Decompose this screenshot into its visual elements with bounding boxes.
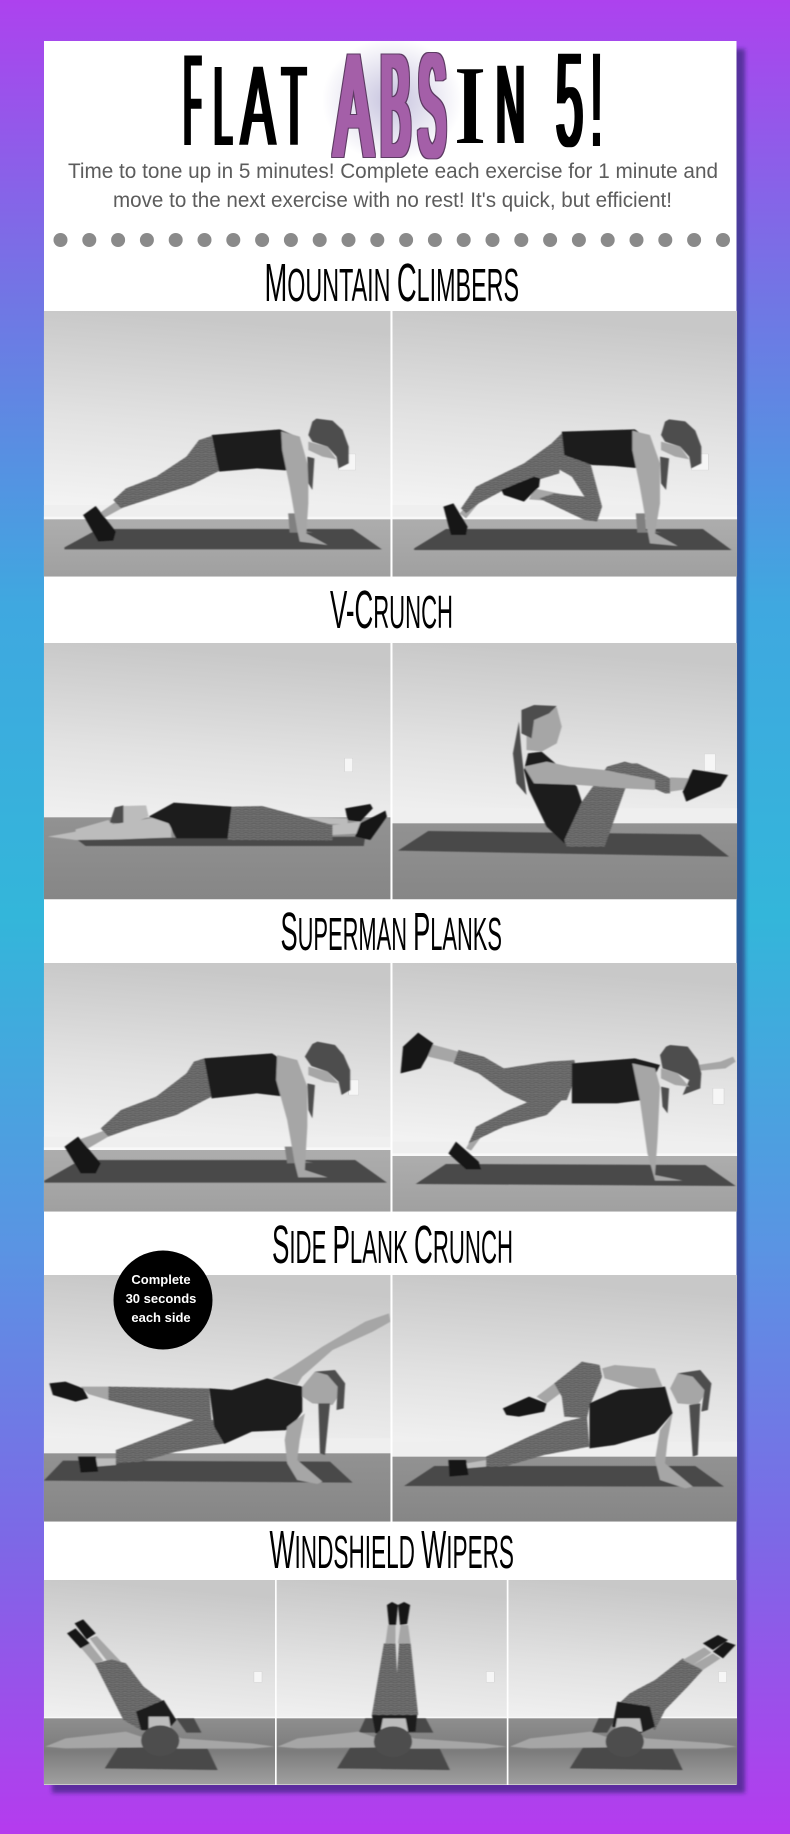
infographic page: ! [592, 26, 601, 175]
dotted divider [54, 233, 730, 247]
title: A [241, 43, 275, 169]
callout: complete 30 seconds each side: each side [131, 1310, 191, 1325]
intro text [68, 160, 718, 212]
title: L [214, 43, 232, 169]
title: N [496, 42, 525, 167]
photo: side plank extended [44, 1275, 390, 1522]
photo: high plank [44, 963, 390, 1212]
intro text: Time to tone up in 5 minutes! Complete each exercise for 1 minute and [68, 160, 718, 183]
photos: side plank crunch [44, 1275, 737, 1522]
heading: v-crunch: V-CRUNCH [330, 580, 453, 640]
photos: windshield wipers [44, 1580, 737, 1785]
callout: complete 30 seconds each side [114, 1250, 212, 1350]
photo: side plank knee to elbow [392, 1275, 737, 1522]
photo: arm and leg raised [392, 963, 737, 1212]
heading: side plank crunch: SIDE PLANK CRUNCH [272, 1215, 513, 1275]
callout: complete 30 seconds each side: 30 seconds [126, 1291, 196, 1306]
heading: superman planks: SUPERMAN PLANKS [280, 902, 502, 962]
photos: superman planks [44, 963, 737, 1212]
photo: legs left [44, 1580, 275, 1785]
intro text: move to the next exercise with no rest! It's quick, but efficient! [113, 189, 672, 212]
photo: knee drive [392, 311, 737, 577]
title [184, 24, 601, 187]
photo: plank start [44, 311, 390, 577]
title: A [335, 24, 372, 187]
photo: v-sit [392, 643, 737, 899]
callout: complete 30 seconds each side: Complete [131, 1272, 191, 1287]
photo: legs centered [277, 1580, 507, 1785]
photo: lying flat [44, 643, 390, 899]
title: I [456, 44, 484, 168]
photos: v-crunch [44, 643, 737, 899]
title: F [184, 27, 201, 173]
photos: mountain climbers [44, 311, 737, 577]
heading: windshield wipers: WINDSHIELD WIPERS [270, 1520, 514, 1580]
title: S [419, 24, 445, 187]
title: 5 [556, 26, 583, 175]
photo: legs right [508, 1580, 737, 1785]
heading: mountain climbers: MOUNTAIN CLIMBERS [264, 253, 519, 313]
title: T [282, 43, 306, 169]
title: B [381, 24, 410, 187]
